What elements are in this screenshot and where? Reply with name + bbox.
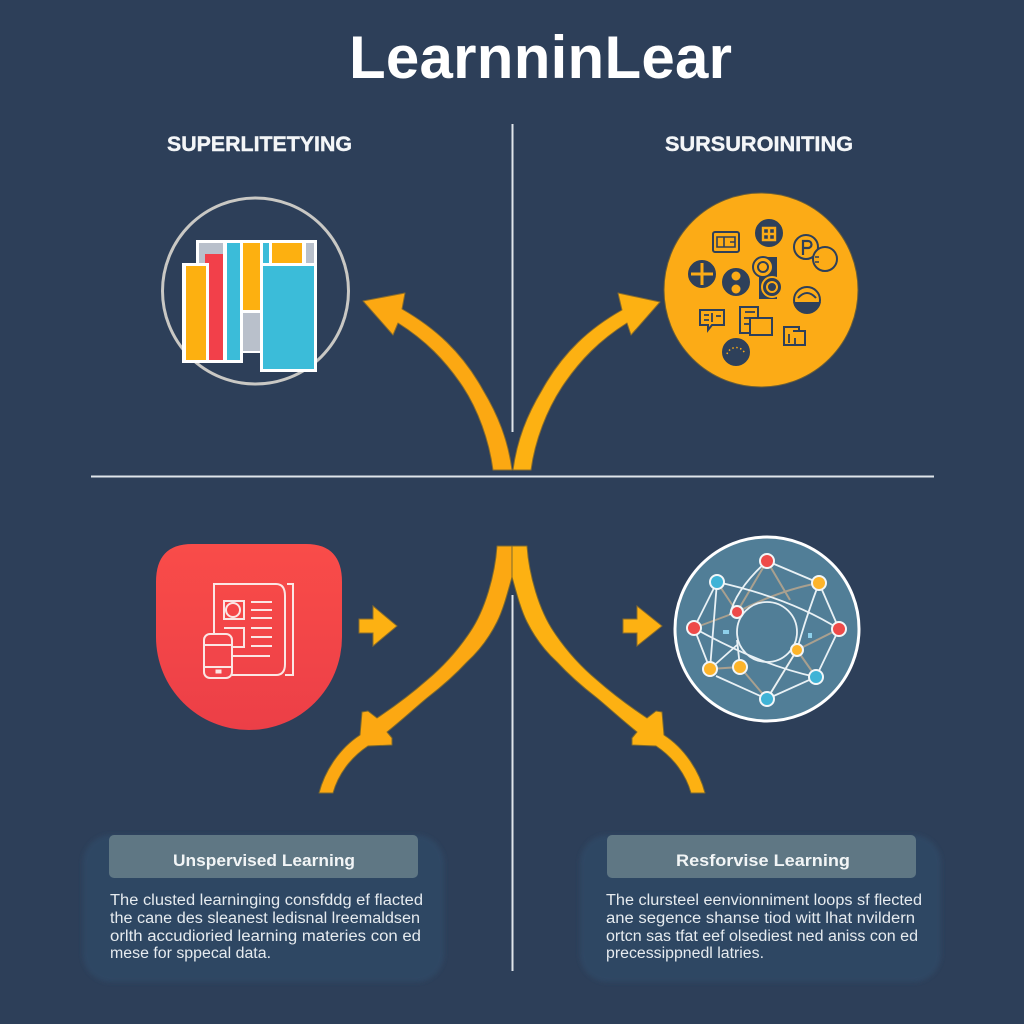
panel body text: precessippnedl latries. [606,945,764,962]
arrow: bottom left curved [319,546,512,793]
panel header [109,835,418,878]
vertical divider: bottom [512,595,514,971]
arrow: bottom right curved [512,546,705,793]
small icon: central dials [753,257,782,299]
small icon: two dots circle [723,269,749,295]
icon: amber circle of small icons [664,193,858,387]
heading: top left: SUPERLITETYING [167,132,352,156]
panel body text: ortcn sas tfat eef olsediest ned aniss con ed [606,928,918,945]
small icon: coins [794,235,837,271]
horizontal divider [91,476,934,478]
small icon: gauge [723,339,749,365]
small icon: grid circle [756,220,782,246]
panel body text: The clursteel eenvionniment loops sf flected [606,892,922,909]
icon: network diagram [675,537,859,721]
small icon: arch circle [794,287,820,313]
panel body text: the cane des sleanest ledisnal lreemaldsen [110,910,420,927]
arrow: small right arrow right [623,606,662,646]
small icon: image sheets [784,327,805,345]
small icon: speech bubble [700,310,724,330]
small icon: cross circle [689,261,715,287]
panel: reinforcement learning [580,835,941,982]
panel body text: mese for sppecal data. [110,945,271,962]
network nodes [687,554,846,706]
panel body text: The clusted learninging consfddg ef flacted [110,892,423,909]
panel body text: orlth accudioried learning materies con ed [110,928,421,945]
heading: top right: SURSUROINITING [665,132,853,156]
panel body text [606,892,922,962]
arrow: top right curved [513,293,660,470]
arrow: small right arrow left [359,606,397,646]
title: LearnninLear [349,24,732,91]
panel body text: ane segence shanse tiod witt lhat nvildern [606,910,915,927]
panel body text [110,892,423,962]
panel header [607,835,916,878]
panel heading: Unspervised Learning [173,851,355,870]
panel heading: Resforvise Learning [676,851,850,870]
small icon: framed chart [713,232,739,252]
icon: red shield with document and phone [156,544,342,730]
panel: unsupervised learning [83,835,444,982]
network small glyphs [723,630,812,638]
small icon: documents [740,307,772,335]
icon: bar blocks in circle [162,198,348,384]
arrow: top left curved [363,293,512,470]
vertical divider: top [512,124,514,432]
